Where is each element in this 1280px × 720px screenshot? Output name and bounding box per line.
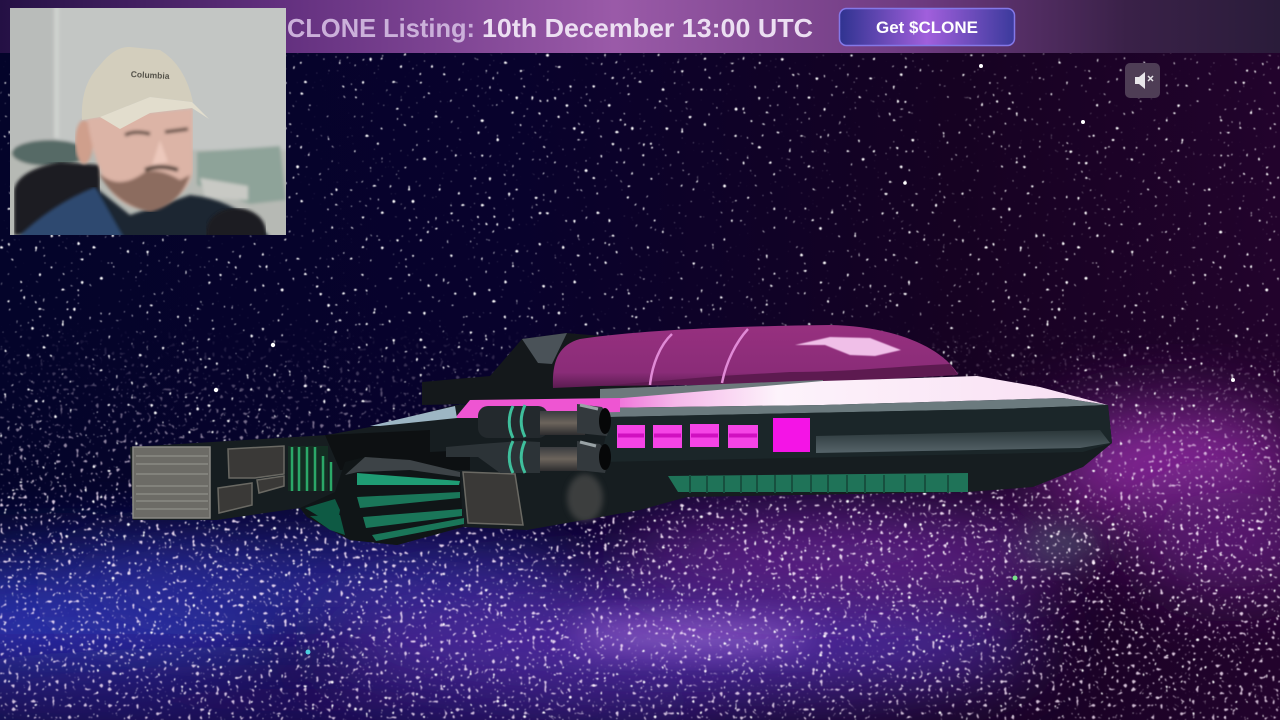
- banner text: date: 10th December 13:00 UTC: [482, 13, 813, 43]
- webcam microphone: [206, 208, 266, 235]
- dark nose: [325, 430, 470, 470]
- plate panels: [218, 446, 523, 525]
- button: get clone: [840, 8, 1014, 46]
- green rear stripes: [288, 446, 331, 491]
- icon: mute button: [1125, 63, 1160, 98]
- magenta windows: [617, 418, 810, 452]
- rear hump: [422, 333, 650, 405]
- nebula glow: [0, 410, 1280, 720]
- engine intake: [300, 457, 464, 545]
- webcam face: [75, 108, 193, 212]
- top banner: [0, 0, 1280, 53]
- spaceship: [130, 325, 1112, 545]
- green underside vents: [668, 473, 968, 493]
- webcam cap: Columbia: [131, 69, 170, 81]
- upper cannon: [478, 404, 611, 438]
- button: get clone: Get $CLONE: [876, 18, 978, 37]
- hull side: [600, 405, 1112, 462]
- banner text: listing: CLONE Listing:: [287, 13, 475, 43]
- white deck: [600, 376, 1108, 408]
- hump fin: [522, 333, 567, 364]
- rear panel: [133, 447, 210, 518]
- canopy: [553, 325, 958, 388]
- webcam shirt: [18, 187, 271, 235]
- grey hull strip: [600, 380, 823, 400]
- magenta front deck: [455, 398, 620, 418]
- exhaust smoke: [567, 474, 603, 522]
- webcam room background: [5, 3, 291, 240]
- light wedge: [370, 406, 457, 426]
- main hull: [130, 398, 1112, 545]
- webcam overlay: [10, 8, 286, 235]
- lower grey edge: [600, 398, 1108, 417]
- lower cannon: [446, 441, 611, 473]
- side plate: [816, 430, 1110, 453]
- webcam cap: [82, 47, 209, 129]
- webcam chair: [14, 162, 100, 235]
